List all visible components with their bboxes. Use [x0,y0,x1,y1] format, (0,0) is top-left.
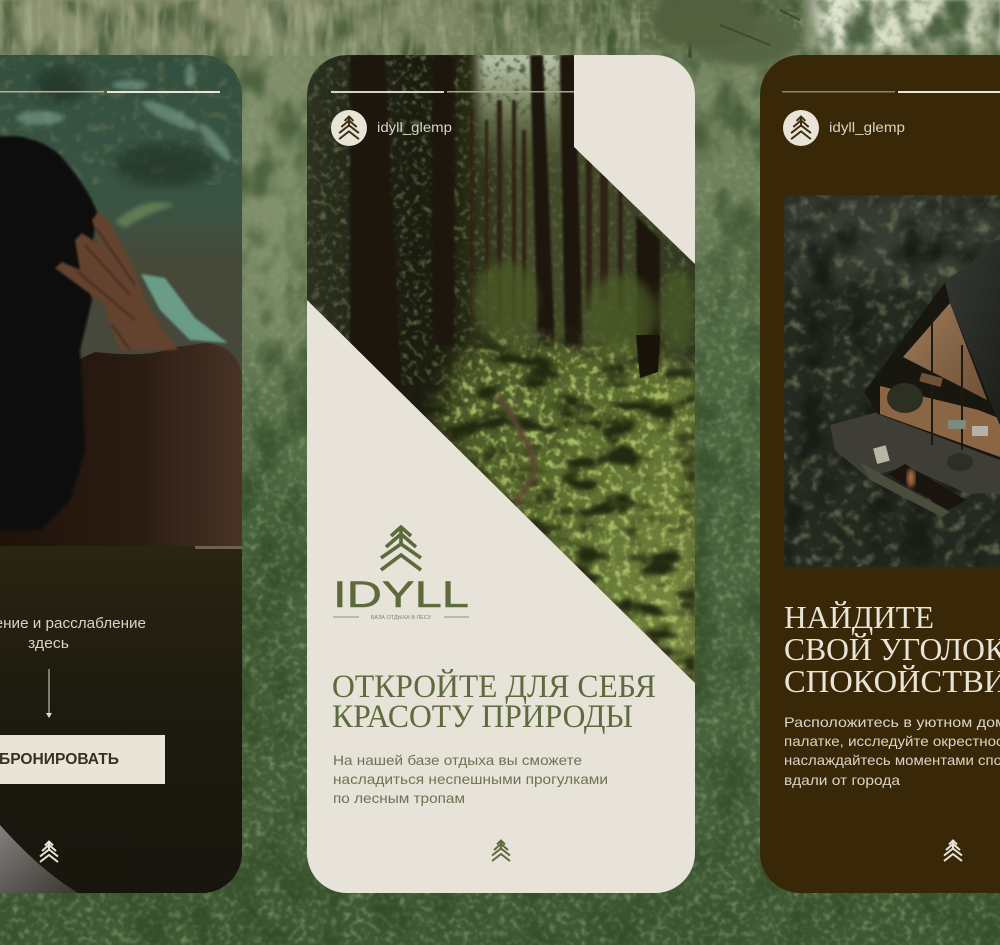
panel: right story card [760,55,1000,893]
heading: НАЙДИТЕ [784,599,934,635]
forest floor [424,326,695,683]
body text [784,714,1000,788]
deck [830,412,1000,494]
A-frame dark structure [864,280,1000,460]
photo: woman among tropical foliage [0,55,242,550]
username: idyll_glemp [829,119,905,135]
icon: tree logo [40,841,58,862]
body text: Расположитесь в уютном доме [784,714,1000,730]
icon: tree logo small [944,840,962,861]
avatar [331,110,367,146]
logo: IDYLL [333,526,469,621]
pool [888,464,966,510]
bushes behind the trunks [473,262,696,355]
body text: палатке, исследуйте окрестности [784,733,1000,749]
heading: ОТКРОЙТЕ ДЛЯ СЕБЯ [332,668,656,705]
tree at the top [653,0,800,66]
icon: tree logo large [381,526,421,570]
icon: tree logo in avatar [339,116,359,139]
logo: IDYLL: БАЗА ОТДЫХА В ЛЕСУ [371,615,432,621]
photo: forest path [307,48,696,690]
body text: вдали от города [784,772,900,788]
arrow down [46,669,52,718]
body text: насладиться неспешными прогулками [333,771,608,787]
back and shoulder [0,343,242,547]
upper floor glass [903,303,987,400]
heading: КРАСОТУ ПРИРОДЫ [332,699,633,735]
body text: по лесным тропам [333,790,465,806]
car and furniture [873,445,890,464]
lower floor glass [880,386,1000,457]
username: idyll_glemp [377,119,452,135]
hair [0,136,98,530]
towel corner [0,825,78,893]
leaf [141,274,228,343]
panel: center story card [307,48,696,893]
heading [332,668,656,735]
logo: IDYLL: IDYLL [333,574,469,615]
icon: tree logo in avatar [791,116,811,139]
heading [784,599,1000,699]
progress bars [331,91,574,93]
button [0,735,165,784]
body text [333,752,608,806]
lower dark band [0,546,242,896]
body text [0,616,146,652]
tree trunks [350,55,660,390]
beam [978,410,996,418]
roof [945,240,1000,425]
panel: left story card [0,55,242,896]
photo: A-frame cabin in the forest [784,195,1000,567]
body text: На нашей базе отдыха вы сможете [333,752,582,768]
progress bars [0,91,220,93]
progress bars [782,91,1000,93]
avatar [783,110,819,146]
hand [55,212,178,350]
body text: здесь [28,636,69,652]
icon: tree logo small [492,840,510,861]
